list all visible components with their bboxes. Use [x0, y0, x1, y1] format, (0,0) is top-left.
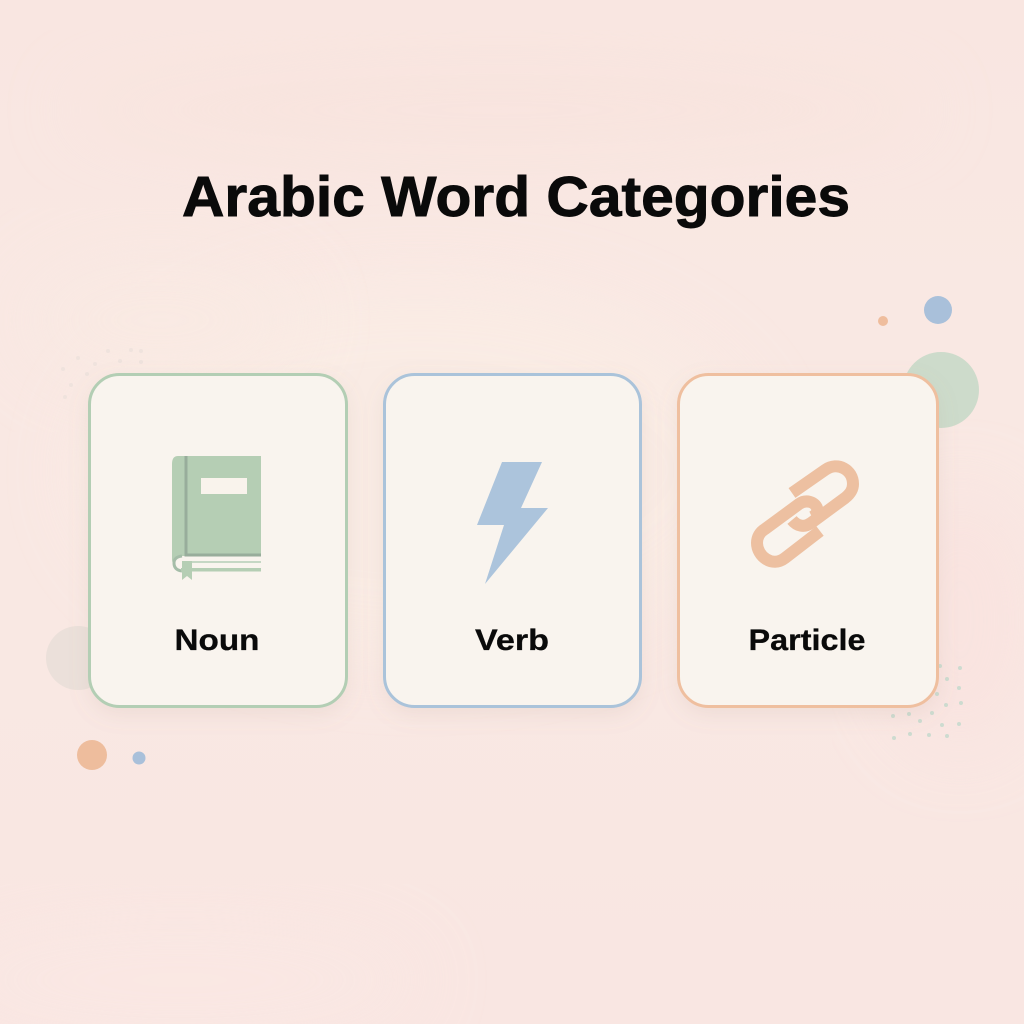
- label: particle: Particle: [748, 624, 866, 657]
- panel: verb: [384, 374, 640, 706]
- icon: lightning bolt: [477, 462, 548, 584]
- panel: particle: [678, 374, 938, 706]
- decorative dots: top left: [61, 348, 143, 399]
- decorative circles: top right: [878, 296, 979, 428]
- label: verb: Verb: [475, 624, 549, 657]
- icon: chain link: [757, 466, 853, 562]
- decorative circles: bottom left: [46, 626, 146, 770]
- label: noun: Noun: [174, 624, 260, 657]
- title: Arabic Word Categories: [182, 165, 850, 229]
- particle card: [678, 374, 938, 706]
- panel: noun: [90, 374, 346, 706]
- decorative dots: bottom right: [891, 664, 963, 740]
- verb card: [384, 374, 640, 706]
- icon: book: [172, 456, 261, 580]
- noun card: [90, 374, 346, 706]
